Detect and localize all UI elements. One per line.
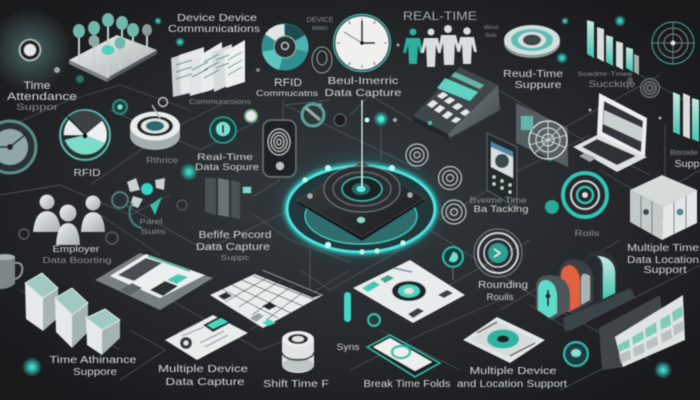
icon: teal message circle xyxy=(564,342,588,366)
icon: small fingerprint badges xyxy=(19,229,118,244)
icon: report card xyxy=(165,315,248,360)
text: RFID communications: Commucatns xyxy=(256,88,318,98)
icon: coffee mug xyxy=(0,254,22,289)
heading: real-time: REAL-TIME xyxy=(403,9,477,23)
icon: spiral fingerprints xyxy=(406,144,466,224)
text: overtime tracking: Bveime Time xyxy=(470,195,527,205)
panel: table display xyxy=(599,295,685,370)
text: overtime tracking xyxy=(470,195,528,214)
icon: network hub node xyxy=(112,178,165,215)
icon: rotating target disc xyxy=(130,98,180,150)
icon: fan panel xyxy=(516,103,568,167)
text: time attendance support lower: Time Athinance xyxy=(50,355,137,366)
icon: smartphone xyxy=(367,335,440,377)
text: employer data booting: Employer xyxy=(52,244,100,254)
icon: glowing capsule xyxy=(344,292,351,322)
glowing nodes xyxy=(364,118,370,122)
text: schedule buckets: Scedmr-Tmee xyxy=(578,71,633,78)
text: rounding rolls: Rouils xyxy=(486,292,514,303)
icon: glowing time attendance lens xyxy=(0,8,72,92)
icon: laptop xyxy=(573,93,647,172)
panel: central glowing device xyxy=(269,100,453,267)
title: device communications: Device Device xyxy=(177,12,257,24)
text: before record data capture support: Befife Pecord xyxy=(198,230,272,241)
text: multiple device and location support xyxy=(457,366,567,390)
text: real-time support: Suppure xyxy=(514,80,562,91)
text: time attendance support: Time xyxy=(24,80,50,92)
text: time attendance support: Suppor xyxy=(16,102,58,112)
text: break time folds: Break Time Folds xyxy=(364,379,450,390)
text: syns: Syns xyxy=(336,342,360,352)
icon: RFID pie dial xyxy=(60,110,110,160)
text: RFID: RFID xyxy=(74,167,101,179)
text: biometric data capture xyxy=(324,76,402,99)
icon: server racks with record cabinet xyxy=(205,178,254,224)
icon: server towers xyxy=(25,273,120,355)
text: bitrode support: Bitroide xyxy=(670,148,698,157)
icon: card with target xyxy=(463,317,545,363)
text: RFID communications xyxy=(256,77,318,98)
icon: employee group xyxy=(33,194,105,245)
icon: calendar grid xyxy=(210,270,323,328)
icon: small teal circle xyxy=(368,314,380,326)
text: communications small: Communcsions xyxy=(189,97,251,106)
text: multiple time data location support: Support xyxy=(644,265,687,276)
text: real-time support: Reud-Time xyxy=(503,69,564,80)
icon: radar target xyxy=(651,22,695,64)
text: time attendance support lower xyxy=(50,355,137,378)
text: before record data capture support: Data Capture xyxy=(196,242,271,253)
text: rolls: Roils xyxy=(574,228,600,238)
light beam xyxy=(361,100,363,187)
text: real-time data support: Data Sopure xyxy=(195,162,259,173)
text: rthrice: Rthrice xyxy=(146,156,179,165)
icon: fingerprint circle xyxy=(640,78,660,98)
icon: document stack xyxy=(171,40,245,97)
icon: database cylinder xyxy=(282,331,314,373)
text: device label: DEVICE xyxy=(306,15,334,24)
bar chart: vertical bars right xyxy=(673,92,699,142)
icon: teal ring ornament near panel suits xyxy=(130,200,187,228)
text: panel suits: Suits xyxy=(140,229,166,236)
text: mirror rolls small: Roils xyxy=(485,33,497,39)
text: multiple time data location support xyxy=(627,243,700,276)
text: overtime tracking: Ba Tacking xyxy=(474,204,528,214)
title: device communications: Communications xyxy=(168,23,260,35)
text: employer data booting: Data Boorting xyxy=(42,255,112,265)
text: multiple device and location support: and Location Support xyxy=(457,379,567,390)
base plate xyxy=(297,169,425,241)
text: mirror rolls small: Mirrod xyxy=(484,25,498,31)
icon: group of people xyxy=(403,25,477,67)
icon: fingerprint badge with dial xyxy=(113,100,257,143)
text: multiple time data location support: Multiple Time xyxy=(627,243,700,254)
icon: left clock gauge xyxy=(0,121,36,173)
icon: tablet dashboard xyxy=(95,253,213,310)
glow halo xyxy=(269,147,453,267)
icon: isometric box stack xyxy=(630,175,697,240)
icon: teal target rings xyxy=(563,173,607,217)
text: real-time support xyxy=(503,69,564,91)
bar chart: isometric bars top right xyxy=(587,20,639,75)
top disc xyxy=(324,166,400,212)
circuit connector lines xyxy=(0,75,700,390)
text: multiple time data location support: Data Location xyxy=(627,255,699,266)
text: real-time data support xyxy=(195,152,259,173)
text: bitrode support xyxy=(670,148,700,170)
icon: mobile phone xyxy=(487,133,517,208)
text: real-time data support: Real-Time xyxy=(197,152,253,163)
text: time attendance support xyxy=(7,80,77,112)
icon: document with donut chart xyxy=(353,260,465,323)
icon: small fingerprint badge xyxy=(312,47,332,73)
text: shift time: Shift Time F xyxy=(263,379,329,390)
icon: rolls device xyxy=(536,251,635,332)
text: time attendance support lower: Suppore xyxy=(73,367,118,378)
text: schedule buckets: Succkiqe xyxy=(588,79,636,89)
text: time attendance support: Attendance xyxy=(7,91,77,103)
text: before record data capture support xyxy=(196,230,272,262)
icon: teal pin marker xyxy=(443,247,463,280)
text: biometric data capture: Data Capture xyxy=(324,87,402,99)
icon: wall clock xyxy=(334,14,390,72)
icon: scanner disc xyxy=(504,25,560,58)
text: multiple device and location support: Multiple Device xyxy=(470,366,557,377)
text: panel suits: Parel xyxy=(140,219,163,226)
text: biometric data capture: Beul-Imerric xyxy=(328,76,398,87)
title: device communications xyxy=(168,12,260,35)
text: device label: BMMG xyxy=(312,26,328,32)
text: employer data booting xyxy=(42,244,112,265)
icon: fingerprint scanner pillar xyxy=(263,120,296,177)
text: device label xyxy=(306,15,334,32)
text: multiple device data capture: Multiple Device xyxy=(158,363,248,375)
icon: rounding target badge xyxy=(474,229,522,277)
text: multiple device data capture xyxy=(158,363,248,388)
text: multiple device data capture: Data Capture xyxy=(166,376,245,388)
text: RFID communications: RFID xyxy=(274,77,302,89)
text: schedule buckets xyxy=(578,71,636,89)
text: panel suits xyxy=(140,219,166,236)
icon: payment terminal xyxy=(413,67,500,138)
icon: pin board platform xyxy=(69,13,157,82)
text: rounding rolls xyxy=(478,280,528,303)
text: mirror rolls small xyxy=(484,25,498,39)
text: before record data capture support: Suppc xyxy=(220,253,250,262)
icon: segmented pie wheel xyxy=(262,24,308,70)
icon: right side dial pair xyxy=(302,104,346,126)
text: rounding rolls: Rounding xyxy=(478,280,528,291)
text: bitrode support: Supp xyxy=(674,159,700,170)
